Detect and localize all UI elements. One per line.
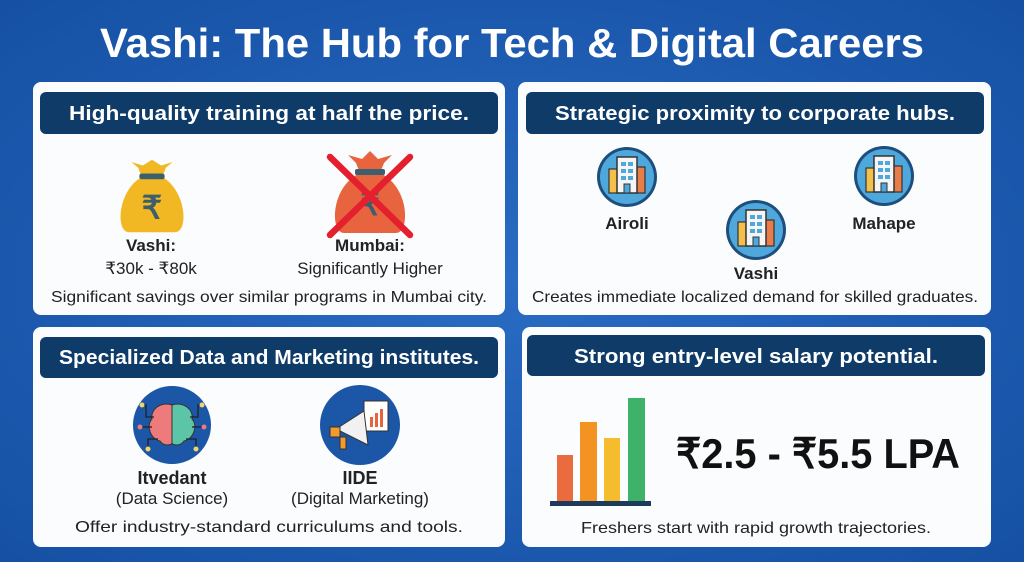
text: mumbai price: Significantly Higher bbox=[297, 259, 443, 278]
label: itvedant: (Data Science) bbox=[116, 489, 228, 508]
text: vashi price: ₹30k - ₹80k bbox=[105, 259, 197, 278]
panel: institutes bbox=[33, 327, 505, 547]
caption: savings: Significant savings over similar programs in Mumbai city. bbox=[51, 289, 487, 306]
caption: demand: Creates immediate localized demand for skilled graduates. bbox=[532, 289, 978, 306]
icon: crossed red money bag: ₹ bbox=[360, 189, 380, 222]
label: itvedant: Itvedant bbox=[137, 468, 207, 488]
label: iide: (Digital Marketing) bbox=[291, 489, 429, 508]
icon: vashi building bbox=[726, 200, 786, 260]
panel: salary bbox=[522, 327, 991, 547]
text: vashi price bbox=[105, 236, 197, 278]
heading: training price: High-quality training at half the price. bbox=[69, 103, 469, 125]
text: mumbai price bbox=[297, 236, 443, 278]
text: mumbai price: Mumbai: bbox=[335, 236, 405, 255]
icon: gold money bag bbox=[121, 160, 183, 232]
heading: training price bbox=[40, 92, 498, 134]
heading: institutes: Specialized Data and Marketing institutes. bbox=[59, 347, 479, 369]
label: itvedant bbox=[116, 468, 228, 508]
heading: proximity: Strategic proximity to corporate hubs. bbox=[555, 103, 955, 125]
bar chart bbox=[550, 398, 651, 506]
icon: crossed red money bag bbox=[330, 151, 410, 235]
icon: gold money bag: ₹ bbox=[142, 189, 162, 225]
label: airoli: Airoli bbox=[605, 214, 649, 233]
text: vashi price: Vashi: bbox=[126, 236, 176, 255]
label: mahape: Mahape bbox=[852, 214, 916, 233]
title: Vashi: The Hub for Tech & Digital Careers bbox=[100, 20, 924, 66]
panel: proximity bbox=[518, 82, 991, 315]
icon: airoli building bbox=[597, 147, 657, 207]
caption: freshers: Freshers start with rapid growth trajectories. bbox=[581, 520, 931, 537]
heading: institutes bbox=[40, 337, 498, 378]
label: vashi: Vashi bbox=[734, 264, 778, 283]
heading: salary: Strong entry-level salary potential. bbox=[574, 346, 938, 368]
icon: brain bbox=[133, 386, 211, 464]
label: iide: IIDE bbox=[342, 468, 378, 488]
heading: proximity bbox=[526, 92, 984, 134]
icon: mahape building bbox=[854, 146, 914, 206]
panel: training price bbox=[33, 82, 505, 315]
label: iide bbox=[291, 468, 429, 508]
caption: curriculums: Offer industry-standard curriculums and tools. bbox=[75, 519, 463, 536]
salary figure: ₹2.5 - ₹5.5 LPA bbox=[676, 430, 960, 477]
icon: megaphone bbox=[320, 385, 400, 465]
heading: salary bbox=[527, 335, 985, 376]
